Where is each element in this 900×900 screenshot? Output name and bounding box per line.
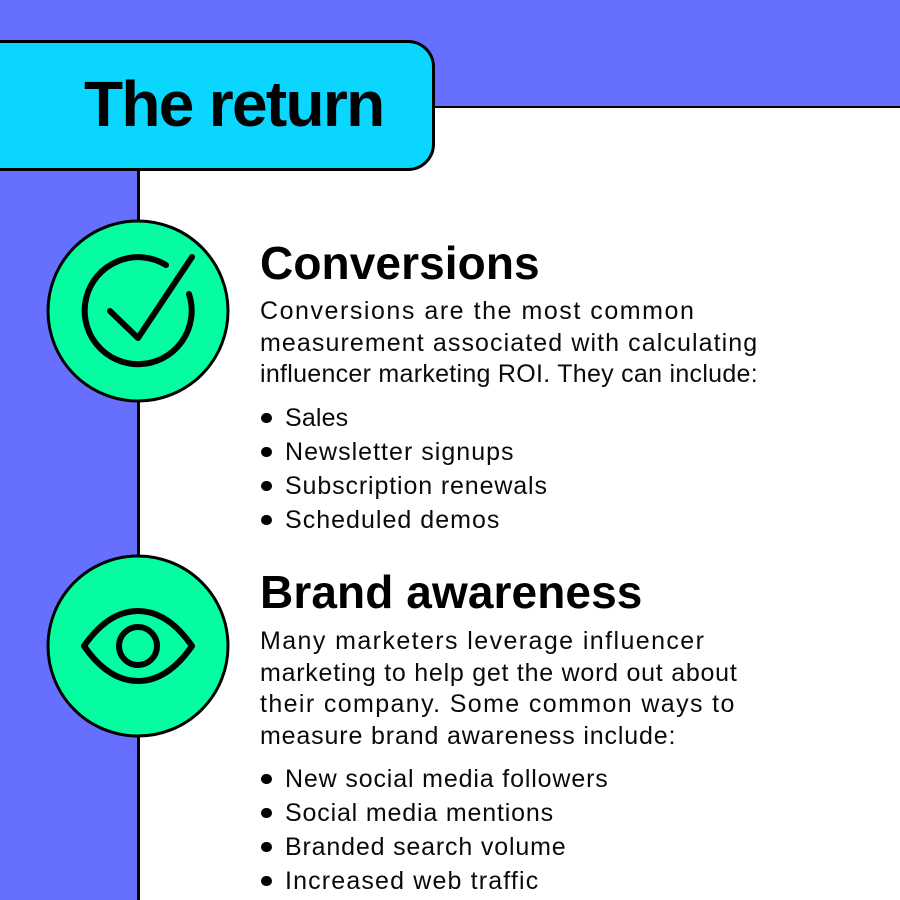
text: brand awareness intro: their company. Some common ways to: [260, 690, 736, 718]
text: conversions intro: influencer marketing ROI. They can include:: [260, 360, 758, 388]
text: brand awareness intro: measure brand awareness include:: [260, 722, 676, 750]
list: conversions: [261, 404, 548, 534]
list: brand awareness: [261, 764, 609, 894]
title: The return: [84, 68, 383, 140]
text: conversions intro: measurement associated with calculating: [260, 329, 758, 357]
icon: check mark circle: [46, 220, 230, 402]
panel: white content area: [137, 106, 900, 900]
list: conversions: Scheduled demos: [285, 506, 500, 534]
list: brand awareness: Social media mentions: [285, 798, 554, 826]
list: conversions: Subscription renewals: [285, 472, 548, 500]
list: brand awareness: Branded search volume: [285, 832, 566, 860]
text: conversions intro: [260, 297, 758, 388]
text: brand awareness intro: marketing to help get the word out about: [260, 659, 738, 687]
heading: Conversions: Conversions: [260, 237, 540, 289]
text: brand awareness intro: [260, 627, 738, 750]
icon: eye circle: [46, 554, 230, 738]
text: brand awareness intro: Many marketers leverage influencer: [260, 627, 705, 655]
list: brand awareness: Increased web traffic: [285, 866, 539, 894]
list: conversions: Sales: [285, 404, 348, 432]
heading: Brand awareness: Brand awareness: [260, 566, 642, 618]
list: conversions: Newsletter signups: [285, 438, 515, 466]
text: conversions intro: Conversions are the most common: [260, 297, 695, 325]
list: brand awareness: New social media followers: [285, 764, 609, 792]
title banner: [0, 40, 435, 171]
